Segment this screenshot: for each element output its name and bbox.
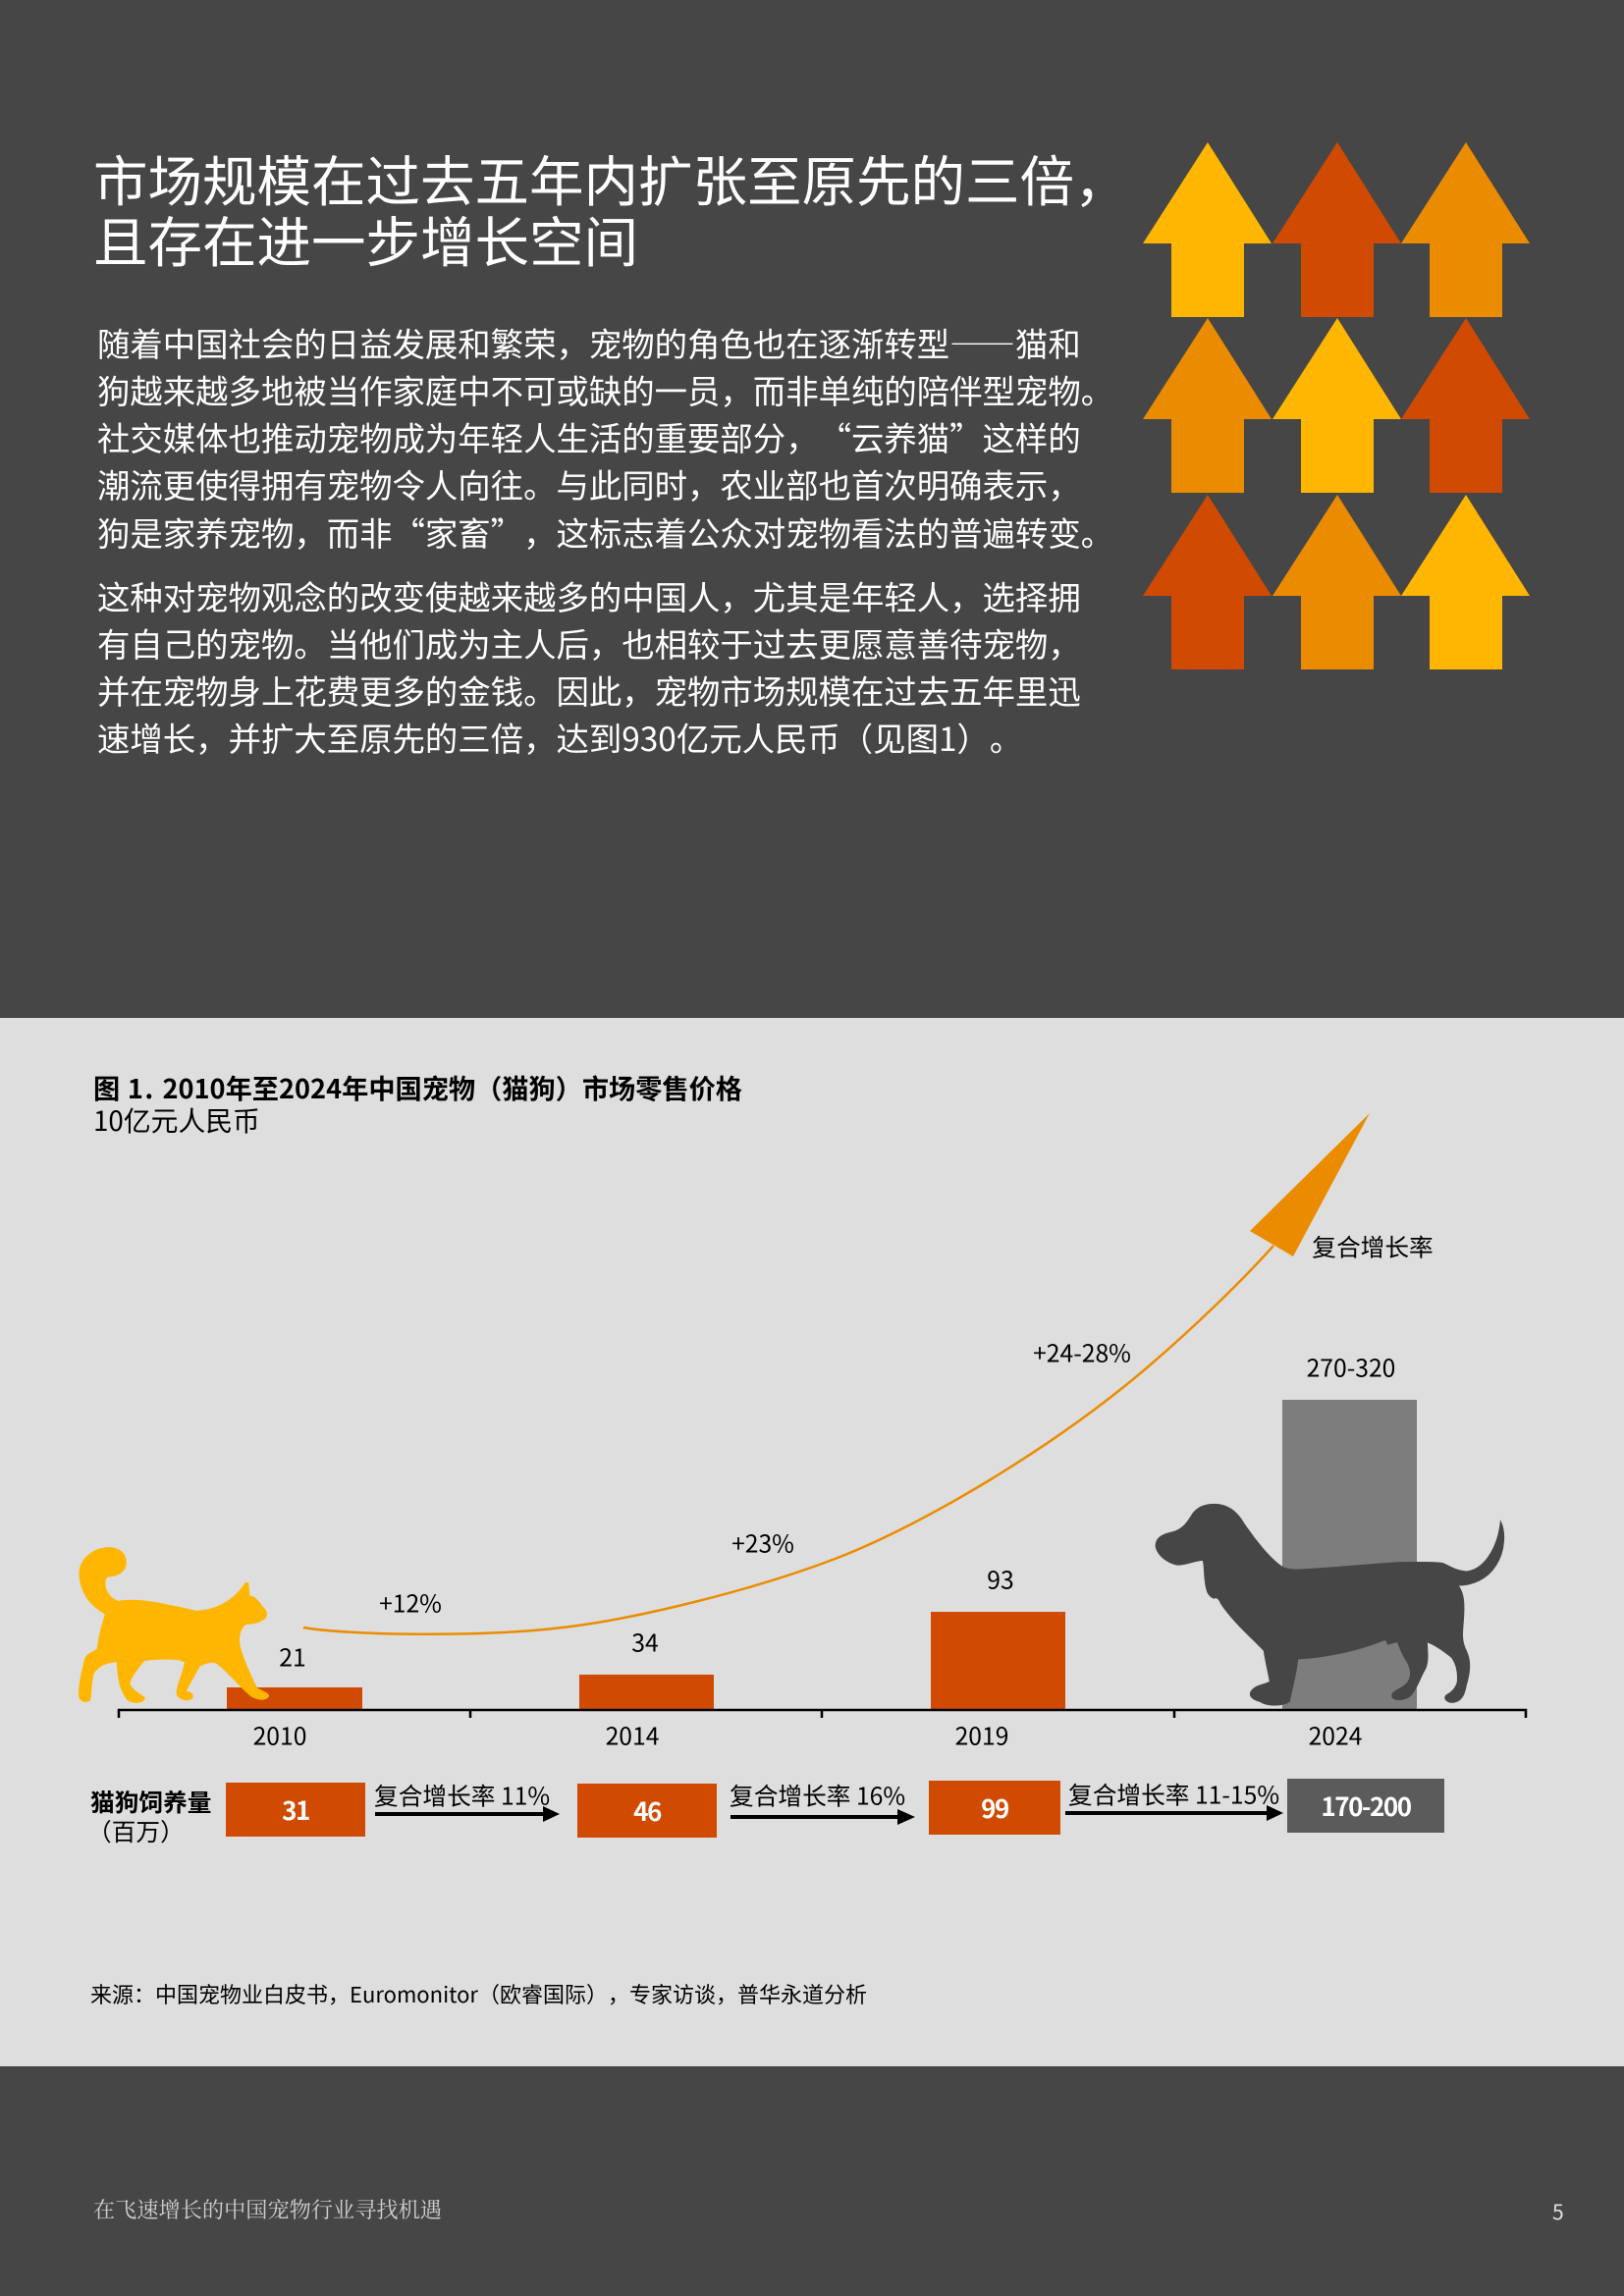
heading: section title: 市场规模在过去五年内扩张至原先的三倍， <box>93 138 1129 217</box>
arrow: holdings 2019-2024 <box>1065 1805 1283 1821</box>
label: pet population row: 猫狗饲养量 <box>90 1784 211 1819</box>
text block: second paragraph: 速增长，并扩大至原先的三倍，达到930亿元人民币（见图1）。 <box>97 713 1022 761</box>
label: bar value 270-320: 270-320 <box>1307 1350 1395 1385</box>
label: CAGR 11%: 复合增长率 11% <box>374 1778 550 1813</box>
heading: chart title: 图 1. 2010年至2024年中国宠物（猫狗）市场零售价格 <box>93 1067 742 1106</box>
chart axis <box>119 1710 1526 1718</box>
footer: page number: 5 <box>1552 2197 1564 2226</box>
label: CAGR 11-15%: 复合增长率 11-15% <box>1068 1777 1279 1812</box>
bar: 2014 <box>579 1675 714 1710</box>
box: 2010 population 31 <box>226 1783 365 1837</box>
text block: second paragraph: 有自己的宠物。当他们成为主人后，也相较于过去更愿意善待宠物， <box>97 618 1081 667</box>
label: bar value 21: 21 <box>279 1639 306 1675</box>
text block: second paragraph: 这种对宠物观念的改变使越来越多的中国人，尤其是年轻人，选择拥 <box>97 571 1081 619</box>
label: CAGR 16%: 复合增长率 16% <box>730 1778 905 1813</box>
box: 2010 population 31: 31 <box>282 1791 309 1828</box>
label: pet population row <box>87 1784 211 1848</box>
icon: dog silhouette <box>1156 1504 1504 1705</box>
footer: publication title: 在飞速增长的中国宠物行业寻找机遇 <box>93 2193 442 2224</box>
bar: 2010 <box>227 1687 362 1710</box>
box: 2019 population 99 <box>929 1781 1060 1835</box>
growth curve <box>303 1246 1273 1634</box>
text block: first paragraph: 狗是家养宠物，而非“家畜”，这标志着公众对宠物看法的普遍转变。 <box>97 507 1113 556</box>
icon: cat silhouette <box>80 1548 269 1702</box>
box: 2014 population 46 <box>577 1784 717 1838</box>
label: CAGR legend: 复合增长率 <box>1312 1229 1434 1264</box>
label: year 2024: 2024 <box>1309 1718 1362 1753</box>
bar: 2019 <box>931 1612 1065 1710</box>
text: source: 来源：中国宠物业白皮书，Euromonitor（欧睿国际），专家访谈，普华永道分析 <box>90 1978 867 2009</box>
text block: first paragraph: 社交媒体也推动宠物成为年轻人生活的重要部分，“云养猫”这样的 <box>97 412 1081 460</box>
label: year 2010: 2010 <box>253 1718 306 1753</box>
arrow head <box>1250 1113 1370 1256</box>
text block: first paragraph: 潮流更使得拥有宠物令人向往。与此同时，农业部也首次明确表示， <box>97 459 1081 507</box>
text: chart unit: 10亿元人民币 <box>93 1100 260 1140</box>
arrow: holdings 2010-2014 <box>375 1806 560 1822</box>
label: bar value 93: 93 <box>987 1562 1014 1597</box>
box: 2014 population 46: 46 <box>633 1792 661 1829</box>
heading: section title: 且存在进一步增长空间 <box>93 199 638 278</box>
text block: second paragraph: 并在宠物身上花费更多的金钱。因此，宠物市场规模在过去五年里迅 <box>97 666 1081 714</box>
label: growth +24-28%: +24-28% <box>1033 1335 1131 1370</box>
label: bar value 34: 34 <box>631 1625 659 1660</box>
box: 2024 population 170-200 <box>1287 1779 1444 1833</box>
box: 2019 population 99: 99 <box>981 1789 1008 1826</box>
text block: first paragraph <box>97 318 1113 556</box>
bar: 2024 <box>1282 1400 1417 1710</box>
text block: first paragraph: 狗越来越多地被当作家庭中不可或缺的一员，而非单纯的陪伴型宠物。 <box>97 365 1113 413</box>
label: growth +23%: +23% <box>731 1525 794 1561</box>
arrow: holdings 2014-2019 <box>731 1809 915 1825</box>
label: year 2014: 2014 <box>606 1718 659 1753</box>
label: year 2019: 2019 <box>955 1718 1008 1753</box>
panel: light chart background <box>0 1018 1624 2066</box>
label: pet population row: （百万） <box>87 1813 185 1848</box>
box: 2024 population 170-200: 170-200 <box>1321 1788 1411 1824</box>
heading: section title <box>93 138 1129 278</box>
text block: second paragraph <box>97 571 1081 761</box>
label: growth +12%: +12% <box>379 1585 442 1621</box>
text block: first paragraph: 随着中国社会的日益发展和繁荣，宠物的角色也在逐渐转型——猫和 <box>97 318 1081 366</box>
